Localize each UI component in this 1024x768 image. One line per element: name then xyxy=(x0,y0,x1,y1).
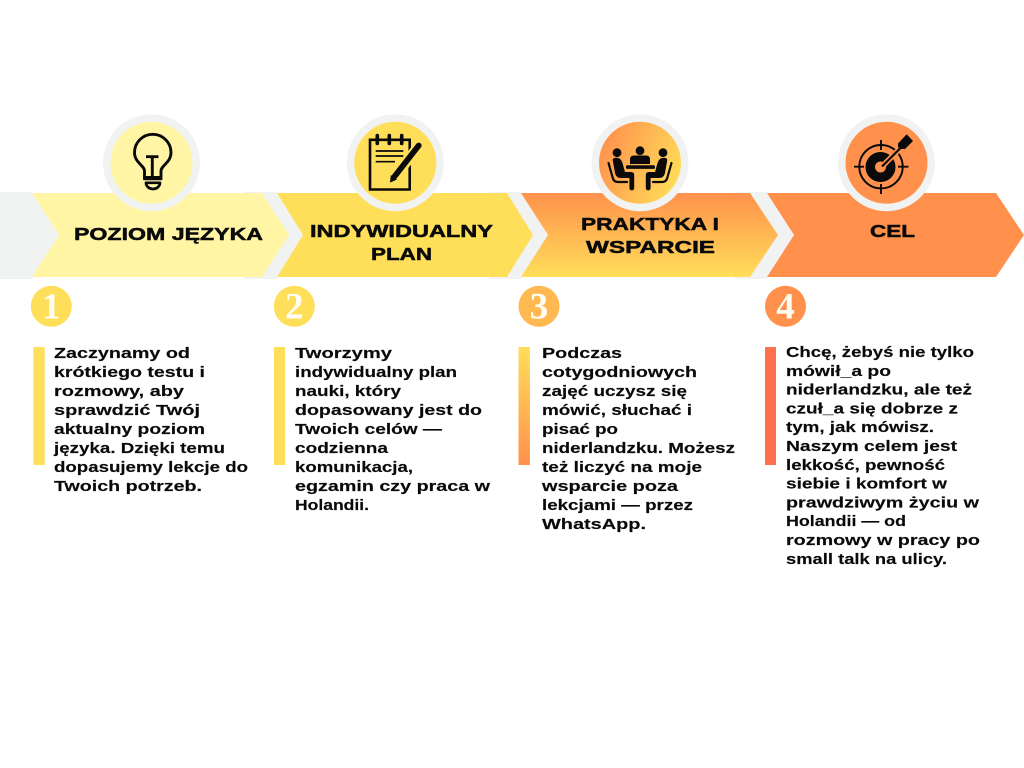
text block: step 2 description: codzienna xyxy=(295,440,389,457)
panel: step 4 goal xyxy=(767,114,1024,277)
arrow: step 1 banner xyxy=(32,193,289,277)
text block: step 3 description xyxy=(541,345,735,533)
number badge 1 xyxy=(31,286,72,328)
number badge 2 xyxy=(274,286,315,328)
text block: step 3 description: mówić, słuchać i xyxy=(542,402,692,419)
heading: step 2 xyxy=(310,221,493,264)
text block: step 4 description: Holandii — od xyxy=(786,513,906,530)
text block: step 2 description: Holandii. xyxy=(295,497,369,514)
arrow: step 3 banner xyxy=(521,193,778,277)
text block: step 2 description: dopasowany jest do xyxy=(295,402,482,419)
text block: step 3 description: lekcjami — przez xyxy=(542,497,693,514)
accent bar 4 xyxy=(765,347,776,465)
text block: step 4 description xyxy=(786,344,980,568)
arrow: step 4 banner xyxy=(767,193,1024,277)
accent bar 2 xyxy=(274,347,285,465)
text block: step 4 description: rozmowy w pracy po xyxy=(786,532,980,549)
text block: step 3 description: pisać po xyxy=(542,421,618,438)
text block: step 4 description: small talk na ulicy. xyxy=(786,551,947,568)
arrow: step 2 banner xyxy=(277,193,533,277)
text block: step 2 description: Twoich celów — xyxy=(295,421,442,438)
text block: step 1 description: rozmowy, aby xyxy=(54,383,185,400)
panel: step 1 language level xyxy=(0,114,303,279)
icon: light bulb badge xyxy=(103,114,200,211)
icon: target with dart badge xyxy=(838,114,935,211)
number badge 4: 4 xyxy=(776,286,795,328)
panel: step 3 practice and support xyxy=(521,114,794,279)
heading: step 2: PLAN xyxy=(371,244,432,264)
text block: step 3 description: WhatsApp. xyxy=(542,516,646,533)
text block: step 3 description: też liczyć na moje xyxy=(542,459,702,476)
text block: step 1 description: Zaczynamy od xyxy=(54,345,190,362)
text block: step 4 description: czuł_a się dobrze z xyxy=(786,400,958,417)
text block: step 4 description: Naszym celem jest xyxy=(786,438,957,455)
text block: step 2 description xyxy=(295,345,490,514)
text block: step 1 description xyxy=(53,345,248,495)
text block: step 2 description: Tworzymy xyxy=(295,345,393,362)
number badge 4 xyxy=(765,286,806,328)
icon: people at table badge xyxy=(592,114,688,211)
text block: step 1 description: dopasujemy lekcje do xyxy=(54,459,248,476)
icon: notepad and pencil badge xyxy=(347,114,444,211)
text block: step 1 description: języka. Dzięki temu xyxy=(53,440,225,457)
text block: step 4 description: niderlandzku, ale też xyxy=(786,382,972,399)
text block: step 1 description: Twoich potrzeb. xyxy=(54,478,202,495)
text block: step 2 description: indywidualny plan xyxy=(295,364,457,381)
heading: step 3: WSPARCIE xyxy=(586,237,715,257)
text block: step 4 description: siebie i komfort w xyxy=(786,476,947,493)
text block: step 4 description: lekkość, pewność xyxy=(786,457,945,474)
text block: step 3 description: wsparcie poza xyxy=(541,478,679,495)
text block: step 2 description: komunikacja, xyxy=(295,459,413,476)
panel: step 2 individual plan xyxy=(277,114,548,279)
text block: step 4 description: prawdziwym życiu w xyxy=(786,494,979,511)
heading: step 1: POZIOM JĘZYKA xyxy=(74,224,263,244)
text block: step 4 description: mówił_a po xyxy=(786,363,891,380)
text block: step 3 description: zajęć uczysz się xyxy=(542,383,687,400)
heading: step 3: PRAKTYKA I xyxy=(581,214,719,234)
text block: step 4 description: Chcę, żebyś nie tylko xyxy=(786,344,974,361)
number badge 1: 1 xyxy=(42,286,61,328)
heading: step 3 xyxy=(581,214,719,257)
accent bar 3 xyxy=(518,347,530,465)
text block: step 1 description: aktualny poziom xyxy=(54,421,205,438)
number badge 3 xyxy=(518,286,560,328)
accent bar 1 xyxy=(33,347,45,465)
number badge 2: 2 xyxy=(285,286,304,328)
text block: step 3 description: cotygodniowych xyxy=(542,364,697,381)
text block: step 1 description: krótkiego testu i xyxy=(54,364,205,381)
text block: step 3 description: niderlandzku. Możesz xyxy=(542,440,735,457)
text block: step 2 description: egzamin czy praca w xyxy=(295,478,490,495)
text block: step 4 description: tym, jak mówisz. xyxy=(786,419,934,436)
text block: step 1 description: sprawdzić Twój xyxy=(54,402,200,419)
heading: step 4: CEL xyxy=(870,221,915,241)
text block: step 2 description: nauki, który xyxy=(295,383,402,400)
text block: step 3 description: Podczas xyxy=(542,345,622,362)
number badge 3: 3 xyxy=(530,286,548,328)
heading: step 2: INDYWIDUALNY xyxy=(310,221,493,241)
